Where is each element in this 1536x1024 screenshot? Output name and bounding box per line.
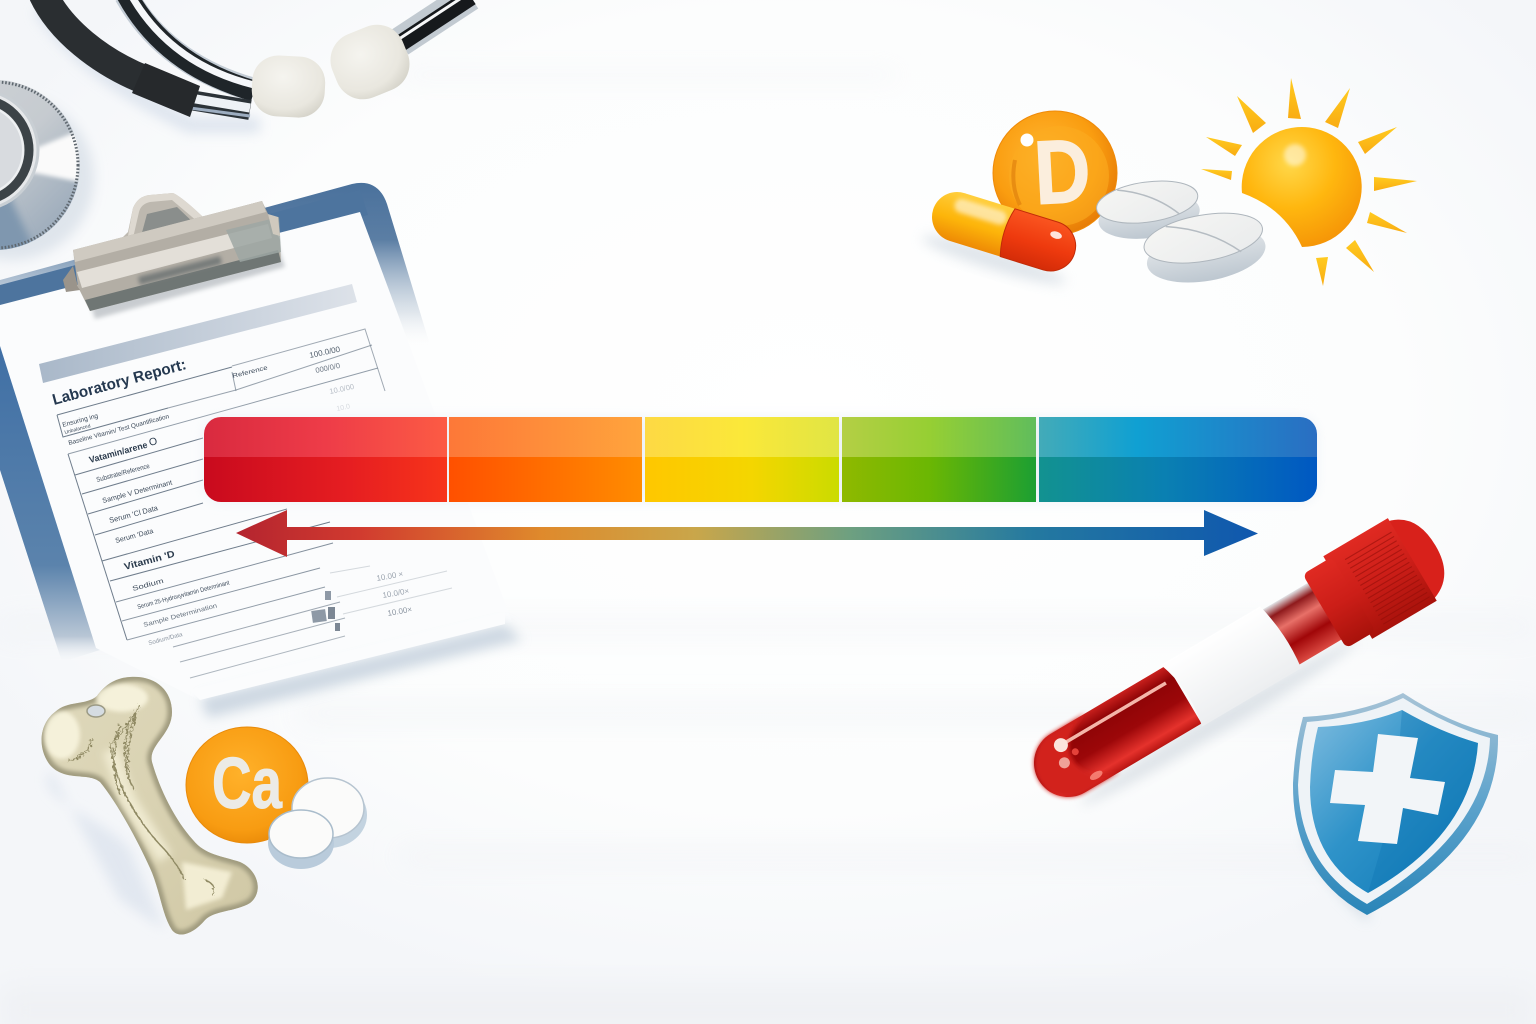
vitamin D capsule bbox=[919, 185, 1082, 292]
tablet back bbox=[291, 778, 367, 848]
report text: 10.0/0× bbox=[382, 586, 410, 600]
medical shield bbox=[1293, 693, 1498, 922]
left chrome tube bbox=[126, 0, 254, 116]
black rubber tube bbox=[43, 0, 200, 117]
vitamin D sphere bbox=[993, 111, 1117, 235]
bone bbox=[42, 677, 258, 935]
small data blocks bbox=[311, 591, 340, 631]
segment: blue bbox=[1039, 417, 1317, 502]
report text: Vitamin 'D bbox=[123, 549, 176, 573]
sun rays bbox=[1201, 78, 1417, 286]
clipboard with laboratory report bbox=[0, 183, 522, 718]
report text: 10.0 bbox=[336, 403, 351, 413]
tablet two bbox=[1140, 205, 1270, 291]
report text: Serum 'Data bbox=[115, 528, 154, 545]
segment: yellow bbox=[645, 417, 839, 502]
report text: Reference bbox=[232, 364, 269, 380]
ear tips bbox=[250, 16, 418, 119]
red cap bbox=[1300, 504, 1460, 653]
chest piece bbox=[0, 80, 94, 260]
tablet front bbox=[268, 810, 334, 869]
report text bbox=[62, 345, 413, 647]
bone texture bbox=[67, 705, 214, 895]
blood-filled glass bbox=[1021, 665, 1202, 810]
sun disc bbox=[1242, 127, 1362, 247]
vitamin D sphere: D bbox=[1032, 120, 1093, 223]
segment: red bbox=[204, 417, 447, 502]
tablets bbox=[1094, 175, 1270, 291]
report text: Unbalanced bbox=[64, 423, 92, 436]
report heading: Laboratory Report: bbox=[51, 356, 188, 409]
report text: Sodium bbox=[132, 578, 165, 593]
tube shadow bbox=[40, 8, 260, 125]
report text: Baseline Vitamin/ Test Quantification bbox=[68, 413, 170, 447]
report text: 10.0/00 bbox=[329, 382, 355, 396]
report table lines bbox=[57, 329, 452, 678]
stethoscope bbox=[0, 0, 471, 260]
right chrome tube bbox=[399, 0, 471, 43]
paper fade shadow bbox=[200, 624, 522, 718]
report text: Ensuring ing bbox=[62, 413, 99, 429]
report text: O bbox=[148, 435, 159, 449]
header band bbox=[39, 284, 357, 383]
calcium coin bbox=[186, 727, 308, 843]
calcium tablets bbox=[268, 778, 367, 869]
colour scale bar bbox=[204, 417, 1317, 502]
report text: Serum 25-Hydroxyvitamin Determinant bbox=[137, 580, 230, 611]
report text: Serum 'Cl Data bbox=[108, 503, 160, 525]
report text: Substrate/Reference bbox=[96, 463, 151, 484]
cross bbox=[1330, 734, 1445, 844]
report text: Vatamin/arene bbox=[88, 440, 148, 465]
sun bbox=[1201, 78, 1417, 286]
report text: 10.00× bbox=[387, 605, 413, 618]
segment: orange bbox=[449, 417, 642, 502]
label bbox=[1161, 603, 1303, 729]
report text: 000/0/0 bbox=[315, 361, 341, 375]
segment: green bbox=[842, 417, 1036, 502]
report text: Sample Determination bbox=[143, 602, 218, 629]
bone hole bbox=[87, 705, 105, 717]
double-headed gradient arrow bbox=[236, 510, 1258, 557]
report text: Sample V Determinant bbox=[102, 480, 173, 505]
blood test tube bbox=[1014, 504, 1462, 825]
tablet one bbox=[1094, 175, 1203, 245]
report text: Sodium/Data bbox=[148, 632, 184, 647]
upper glass bbox=[1262, 579, 1347, 667]
board bbox=[0, 183, 430, 662]
report text: 10.00 × bbox=[376, 569, 404, 583]
calcium coin: Ca bbox=[212, 743, 282, 824]
report text: 100.0/00 bbox=[309, 345, 341, 360]
metal clip bbox=[63, 193, 285, 319]
paper bbox=[0, 212, 512, 702]
